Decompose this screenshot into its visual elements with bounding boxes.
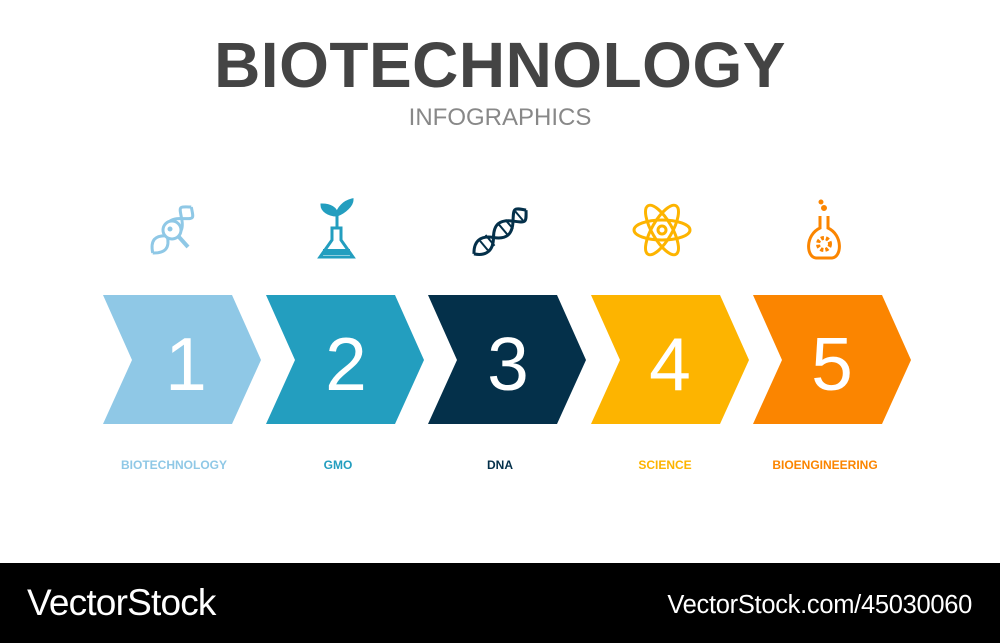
- icon: dna magnifier: [147, 202, 197, 258]
- footer brand: VectorStock: [27, 582, 216, 623]
- label 5: BIOENGINEERING: [772, 458, 878, 472]
- label 4: SCIENCE: [638, 458, 692, 472]
- arrow 1: [103, 295, 261, 424]
- arrow 4: [591, 295, 749, 424]
- icon: flask gear: [809, 201, 839, 258]
- arrow 1: 1: [165, 322, 207, 406]
- arrow 5: [753, 295, 911, 424]
- arrow 2: [266, 295, 424, 424]
- arrow 2: 2: [325, 322, 367, 406]
- arrow 5: 5: [811, 322, 853, 406]
- arrow 3: 3: [487, 322, 529, 406]
- footer url: VectorStock.com/45030060: [667, 591, 972, 619]
- subtitle: INFOGRAPHICS: [409, 104, 591, 131]
- icon: atom: [634, 201, 690, 259]
- arrow 4: 4: [649, 322, 691, 406]
- icon: dna: [469, 204, 531, 260]
- label 3: DNA: [487, 458, 513, 472]
- label 2: GMO: [324, 458, 352, 472]
- label 1: BIOTECHNOLOGY: [121, 458, 227, 472]
- title: BIOTECHNOLOGY: [214, 29, 786, 101]
- arrow 3: [428, 295, 586, 424]
- icon: flask plant: [320, 200, 353, 257]
- footer: [0, 563, 1000, 643]
